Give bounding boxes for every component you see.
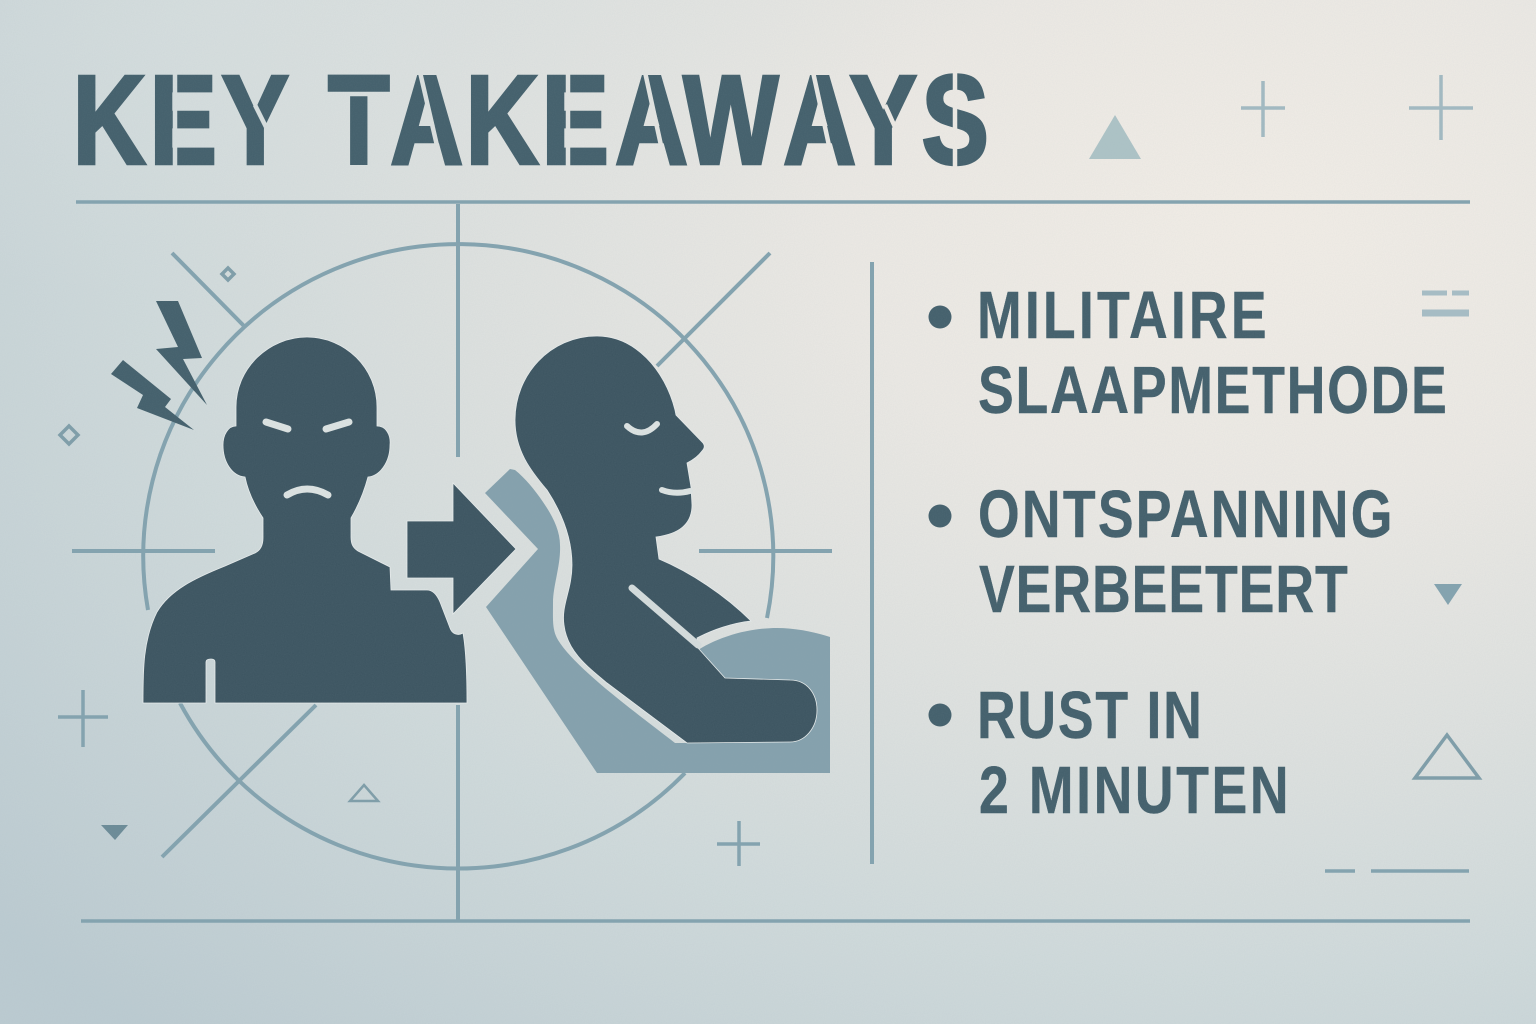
arrow — [407, 483, 516, 614]
triangle marker top — [1089, 115, 1141, 159]
item: rust in 2 minuten — [928, 677, 1289, 827]
takeaway list — [928, 277, 1447, 827]
item: ontspanning verbeetert — [928, 476, 1392, 626]
decorative marks — [58, 75, 1479, 871]
title: KEY TAKEAWAYS — [73, 51, 989, 191]
grid lines and target circle — [72, 202, 1470, 921]
item: ontspanning verbeetert: ONTSPANNING — [978, 476, 1392, 551]
item: militaire slaapmethode: MILITAIRE — [977, 277, 1267, 352]
icon: stressed person — [143, 337, 467, 703]
icon: lightning bolts — [111, 301, 207, 430]
icon: relaxed person — [515, 336, 817, 743]
icon: seat — [485, 469, 830, 773]
item: ontspanning verbeetert: VERBEETERT — [979, 551, 1348, 626]
item: militaire slaapmethode: SLAAPMETHODE — [978, 352, 1447, 427]
triangle marker right — [1434, 584, 1462, 605]
item: rust in 2 minuten: RUST IN — [977, 677, 1202, 752]
item: militaire slaapmethode — [928, 277, 1447, 427]
item: rust in 2 minuten: 2 MINUTEN — [979, 752, 1289, 827]
triangle marker left — [101, 825, 128, 840]
